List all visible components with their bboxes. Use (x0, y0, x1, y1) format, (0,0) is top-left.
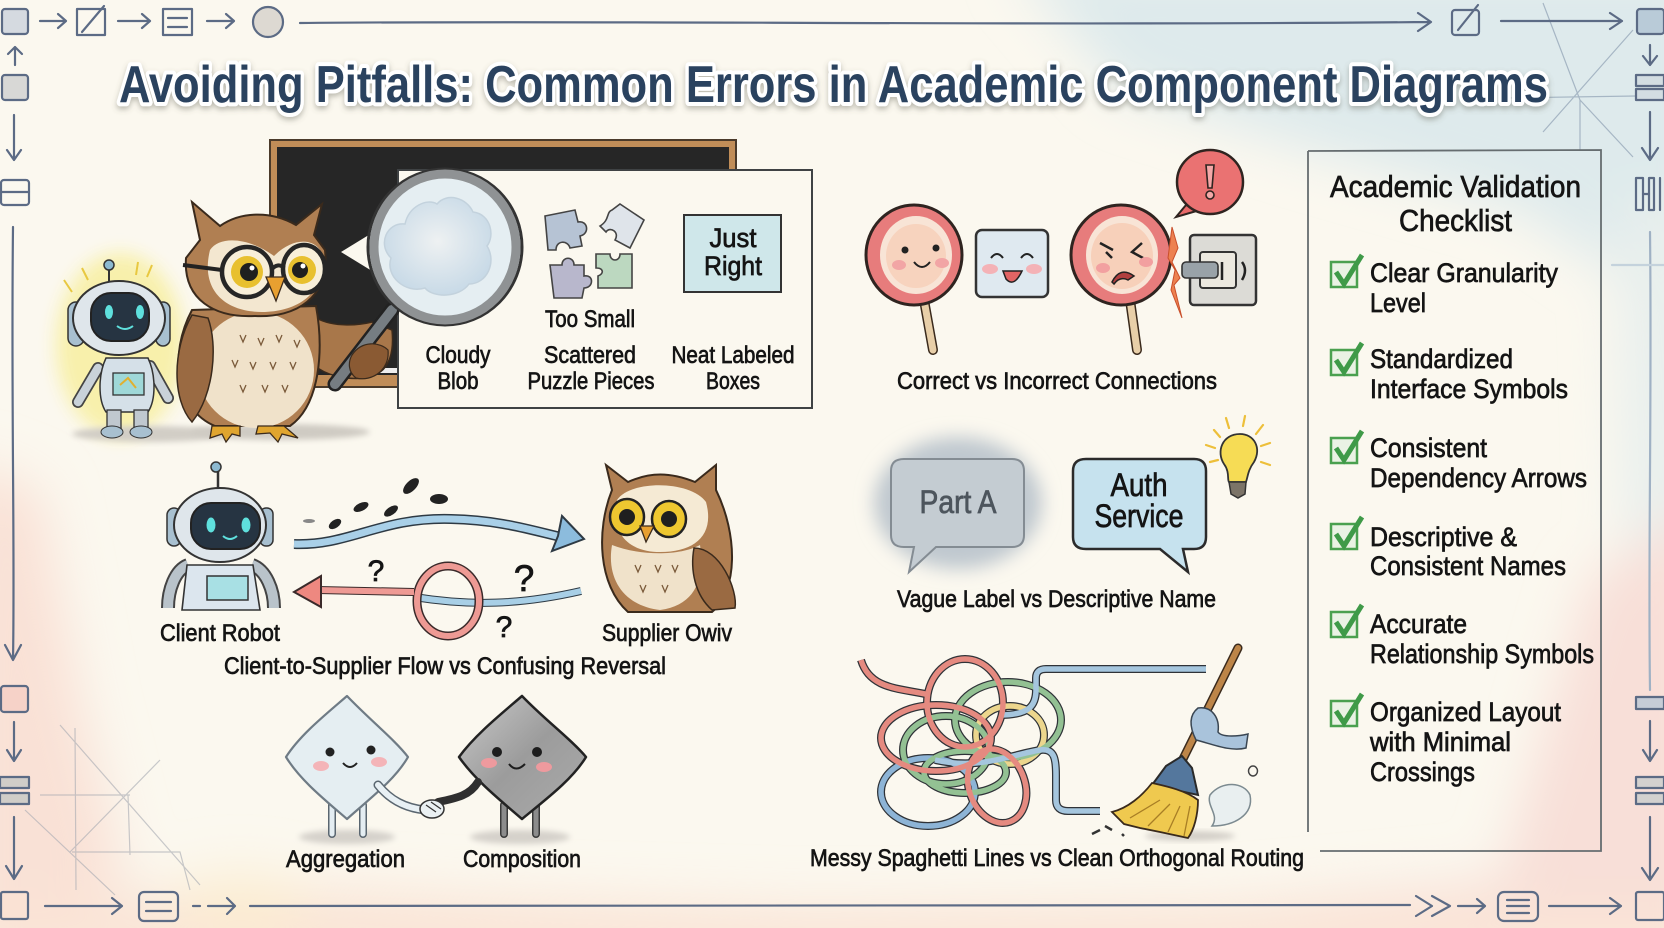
item: descriptive consistent names: Descriptive & (1370, 522, 1517, 552)
icon: just right box: Right (704, 251, 762, 281)
heading: checklist (1330, 169, 1581, 238)
icon: unhappy lollipop socket (1071, 205, 1256, 350)
item: accurate relationship symbols: Relationship Symbols (1370, 639, 1594, 669)
decorative web bottom left (25, 725, 200, 895)
label: aggregation: Aggregation (286, 846, 405, 873)
item: clear granularity level: Level (1370, 288, 1426, 318)
icon: vague speech bubble: Part A (920, 484, 997, 520)
label: scattered puzzle pieces (528, 342, 654, 395)
panel: labels (874, 416, 1270, 613)
icon: robot with glow (56, 253, 228, 442)
label: scattered puzzle pieces: Puzzle Pieces (528, 368, 654, 395)
comparison card (341, 170, 812, 408)
caption: correct vs incorrect connections: Correct vs Incorrect Connections (897, 368, 1217, 395)
item: descriptive consistent names: Consistent Names (1370, 551, 1566, 581)
item: clear granularity level (1331, 255, 1558, 318)
item: organized layout: with Minimal (1369, 727, 1511, 757)
item: consistent dependency arrows: Consistent (1370, 433, 1487, 463)
panel: client supplier flow (160, 462, 735, 680)
item: clear granularity level: Clear Granularity (1370, 258, 1558, 288)
icon: aggregation diamond (286, 696, 408, 844)
border: right diagram chain (1612, 45, 1664, 880)
icon: descriptive speech bubble: Service (1094, 498, 1184, 534)
item: consistent dependency arrows: Dependency Arrows (1370, 463, 1587, 493)
icon: descriptive speech bubble: Auth (1110, 467, 1168, 503)
caption: messy spaghetti lines: Messy Spaghetti Lines vs Clean Orthogonal Routing (810, 845, 1304, 872)
icon: magnifying glass with cloudy blob (335, 169, 522, 384)
heading: checklist: Academic Validation (1330, 169, 1581, 204)
icon: supplier owl (602, 465, 735, 612)
icon: just right box (684, 215, 781, 292)
border: bottom diagram chain (45, 892, 1664, 921)
label: cloudy blob: Blob (438, 368, 478, 395)
icon: red alert speech bubble (1176, 150, 1243, 217)
item: standardized interface symbols: Standardized (1370, 344, 1513, 374)
label: cloudy blob (426, 342, 490, 395)
label: composition: Composition (463, 846, 581, 873)
item: organized layout: Organized Layout (1370, 697, 1561, 727)
icon: handshake (378, 782, 478, 818)
item: descriptive consistent names (1331, 517, 1566, 581)
icon: scattered puzzle pieces (545, 204, 644, 298)
border: top diagram chain (2, 5, 1664, 37)
icon: just right box: Just (710, 223, 757, 253)
item: organized layout (1331, 694, 1561, 787)
label: supplier owl: Supplier Owiv (602, 620, 732, 647)
border: left diagram chain (0, 47, 29, 919)
caption: client to supplier flow: Client-to-Supplier Flow vs Confusing Reversal (224, 653, 666, 680)
icon: happy lollipop socket (866, 205, 1048, 350)
panel: granularity (56, 140, 812, 442)
label: neat labeled boxes (672, 342, 794, 395)
label: neat labeled boxes: Boxes (706, 368, 760, 395)
arrow: confused red reversal with loop: ? (368, 555, 384, 588)
decorative web top right (1505, 3, 1636, 157)
panel: connections (866, 150, 1256, 395)
icon: light bulb (1206, 416, 1270, 498)
item: organized layout: Crossings (1370, 757, 1475, 787)
arrow: confused red reversal with loop: ? (514, 558, 534, 599)
item: standardized interface symbols: Interface Symbols (1370, 374, 1568, 404)
arrow: correct blue flow with footprints (294, 475, 584, 551)
arrow: confused red reversal with loop (294, 555, 581, 644)
item: consistent dependency arrows (1331, 431, 1587, 493)
icon: vague speech bubble (874, 437, 1042, 572)
icon: broom sweeping (1092, 648, 1258, 841)
panel: academic validation checklist (1308, 150, 1601, 851)
item: standardized interface symbols (1331, 343, 1568, 404)
icon: professor owl (177, 202, 393, 442)
item: accurate relationship symbols: Accurate (1370, 609, 1467, 639)
label: neat labeled boxes: Neat Labeled (672, 342, 794, 369)
caption: vague label vs descriptive name: Vague Label vs Descriptive Name (897, 586, 1216, 613)
item: accurate relationship symbols (1331, 605, 1594, 669)
heading: checklist: Checklist (1399, 203, 1512, 238)
label: Too Small: Too Small (545, 306, 635, 333)
icon: composition diamond (459, 696, 586, 844)
label: client robot: Client Robot (160, 620, 280, 647)
icon: client robot (167, 462, 274, 610)
panel: aggregation and composition (286, 696, 586, 873)
icon: tangled wires (861, 659, 1206, 831)
label: cloudy blob: Cloudy (426, 342, 490, 369)
icon: descriptive speech bubble (1073, 459, 1206, 572)
chalkboard (270, 140, 736, 387)
label: scattered puzzle pieces: Scattered (544, 342, 636, 369)
arrow: confused red reversal with loop: ? (496, 611, 512, 644)
panel: spaghetti vs orthogonal (810, 648, 1304, 872)
